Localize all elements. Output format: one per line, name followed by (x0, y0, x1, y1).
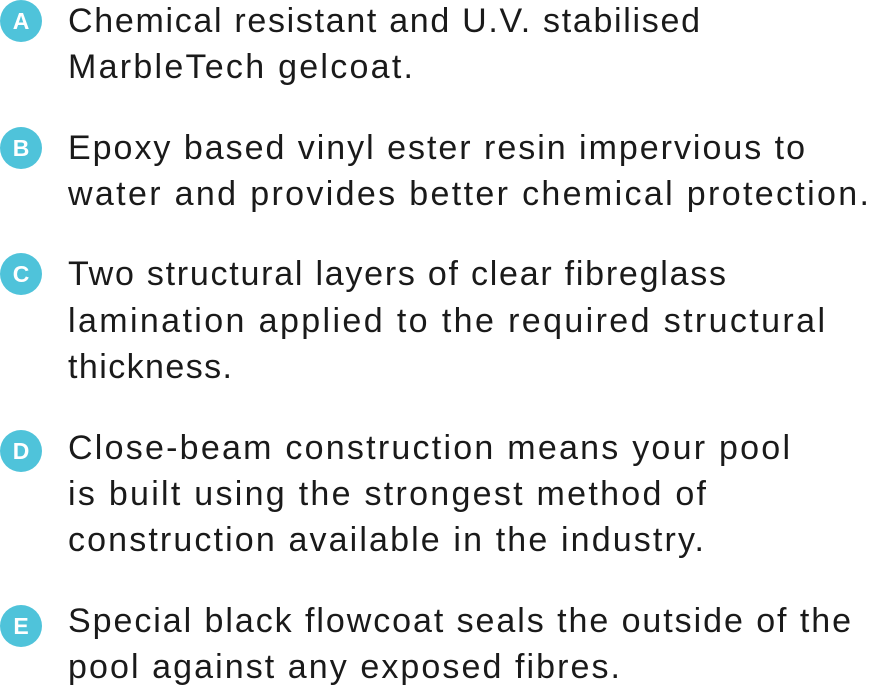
text B: water and provides better chemical protection. (67, 175, 869, 213)
text C: thickness. (68, 348, 232, 386)
text C (68, 255, 825, 386)
text D: Close-beam construction means your pool (68, 429, 790, 467)
text D: is built using the strongest method of (68, 475, 707, 513)
badge E: E (13, 613, 29, 639)
badge C (0, 253, 42, 295)
text A (68, 2, 700, 86)
badge B (0, 127, 42, 169)
badge B: B (13, 135, 29, 161)
badge C: C (13, 261, 29, 287)
badge A (0, 0, 42, 42)
text A: Chemical resistant and U.V. stabilised (68, 2, 700, 40)
text E: pool against any exposed fibres. (68, 648, 620, 686)
text C: lamination applied to the required structural (68, 302, 825, 340)
text D (68, 429, 790, 559)
badge D (0, 430, 42, 472)
text E (68, 602, 851, 686)
text A: MarbleTech gelcoat. (68, 48, 413, 86)
text B (67, 129, 869, 213)
text B: Epoxy based vinyl ester resin impervious to (68, 129, 805, 167)
badge A: A (13, 8, 29, 34)
badge D: D (13, 438, 29, 464)
item B: resin (0, 127, 869, 213)
item A: gelcoat (0, 0, 700, 86)
text E: Special black flowcoat seals the outside of the (68, 602, 851, 640)
badge E (0, 605, 42, 647)
item D: construction (0, 429, 790, 559)
text C: Two structural layers of clear fibreglass (68, 255, 726, 293)
item E: flowcoat (0, 602, 851, 686)
text D: construction available in the industry. (68, 521, 704, 559)
item C: fibreglass (0, 253, 825, 386)
